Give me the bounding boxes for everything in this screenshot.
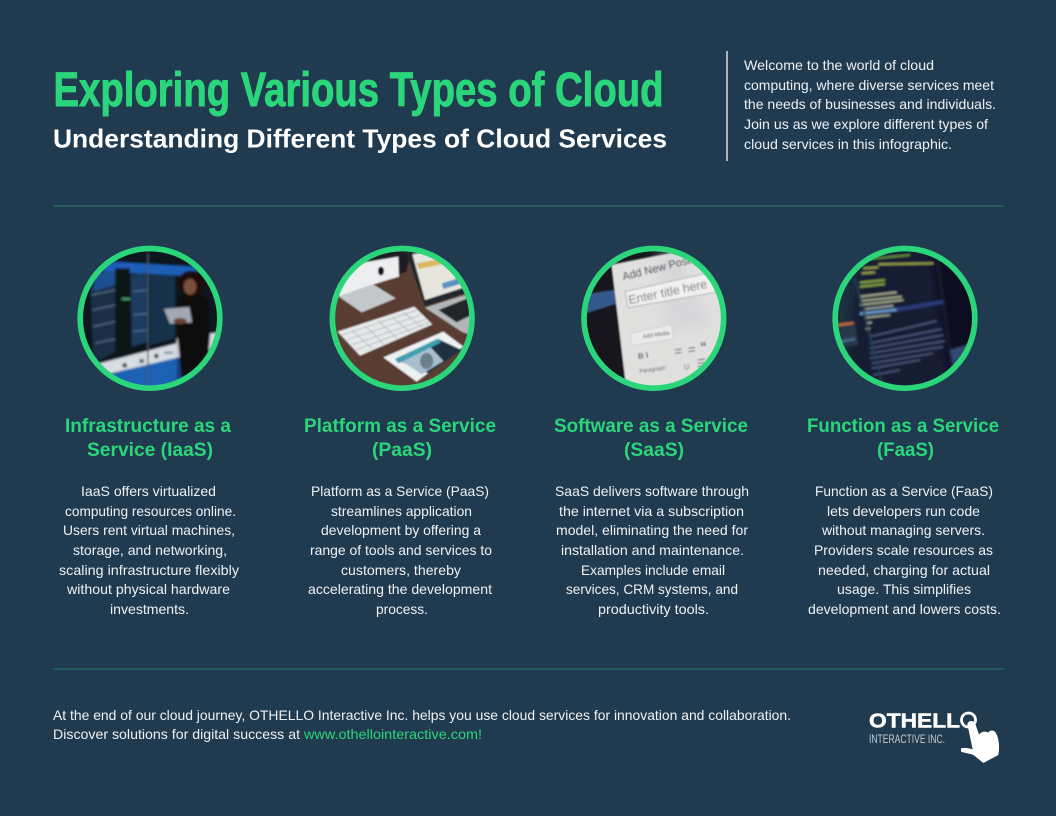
photo: blog editor screen: Add New Post [621, 255, 692, 283]
photo: blog editor screen: “ [699, 339, 708, 355]
description: services, CRM systems, and [566, 581, 738, 597]
logo [869, 710, 999, 763]
subtitle: Understanding Different Types of Cloud Services [53, 124, 667, 154]
heading: Function as a Service [807, 415, 999, 437]
description: the internet via a subscription [559, 503, 744, 519]
logo: INTERACTIVE INC. [869, 732, 945, 746]
logo: OTHELL [869, 710, 960, 732]
photo: blog editor screen: U [683, 362, 690, 372]
infographic page [53, 51, 1004, 763]
description: Users rent virtual machines, [63, 522, 235, 538]
description: usage. This simplifies [837, 581, 971, 597]
description: SaaS delivers software through [555, 483, 749, 499]
description: range of tools and services to [310, 542, 492, 558]
heading: Platform as a Service [304, 415, 496, 437]
photo: blog editor screen: Paragraph [639, 365, 666, 375]
description: productivity tools. [598, 601, 709, 617]
image ring [835, 248, 975, 388]
description [555, 483, 749, 617]
heading [65, 415, 231, 461]
description: Examples include email [581, 562, 725, 578]
heading: Service (IaaS) [87, 439, 213, 461]
heading [807, 415, 999, 461]
description: IaaS offers virtualized [81, 483, 216, 499]
photo: blog editor screen [580, 242, 730, 392]
footer text: At the end of our cloud journey, OTHELLO Interactive Inc. helps you use cloud services for innovation and collaboration. [53, 707, 791, 723]
heading: Software as a Service [554, 415, 748, 437]
description [808, 483, 1001, 617]
description: without managing servers. [821, 522, 985, 538]
heading: (PaaS) [372, 439, 432, 461]
description: customers, thereby [341, 562, 461, 578]
photo: woman in data center [77, 245, 223, 392]
heading [304, 415, 496, 461]
description: Function as a Service (FaaS) [815, 483, 993, 499]
description: development by offering a [321, 522, 481, 538]
description: investments. [110, 601, 189, 617]
description [59, 483, 239, 617]
description: without physical hardware [66, 581, 230, 597]
description: scaling infrastructure flexibly [59, 562, 239, 578]
description: installation and maintenance. [561, 542, 744, 558]
description: development and lowers costs. [808, 601, 1001, 617]
heading: Infrastructure as a [65, 415, 231, 437]
heading: (FaaS) [877, 439, 934, 461]
description: process. [376, 601, 428, 617]
photo: blog editor screen: Enter title here [627, 277, 709, 307]
intro text: cloud services in this infographic. [744, 136, 952, 152]
title: Exploring Various Types of Cloud [54, 64, 664, 117]
image ring [332, 248, 472, 388]
intro text: Join us as we explore different types of [744, 116, 988, 132]
intro text: the needs of businesses and individuals. [744, 96, 996, 112]
photo: code on a screen [832, 245, 980, 392]
intro text: computing, where diverse services meet [744, 77, 994, 93]
panel: IaaS [59, 245, 239, 617]
photo: desk with devices [328, 245, 478, 392]
heading [554, 415, 748, 461]
website link: www.othellointeractive.com! [303, 726, 482, 742]
footer text: Discover solutions for digital success at [53, 726, 300, 742]
description: model, eliminating the need for [556, 522, 748, 538]
icon: pointing hand [961, 721, 999, 763]
description: streamlines application [331, 503, 472, 519]
heading: (SaaS) [624, 439, 684, 461]
image ring [584, 248, 724, 388]
panel: SaaS [554, 242, 749, 617]
description: accelerating the development [308, 581, 492, 597]
description: Providers scale resources as [814, 542, 993, 558]
footer text [53, 707, 791, 742]
description: computing resources online. [65, 503, 236, 519]
image ring [80, 248, 220, 388]
photo: blog editor screen: B I [637, 351, 649, 361]
description [308, 483, 492, 617]
description: Platform as a Service (PaaS) [311, 483, 489, 499]
panel: FaaS [807, 245, 1001, 617]
description: storage, and networking, [73, 542, 227, 558]
panel: PaaS [304, 245, 496, 617]
title block [53, 64, 667, 154]
intro text [744, 57, 996, 152]
photo: blog editor screen: Add Media [642, 330, 671, 340]
intro text: Welcome to the world of cloud [744, 57, 934, 73]
description: lets developers run code [827, 503, 980, 519]
description: needed, charging for actual [818, 562, 990, 578]
